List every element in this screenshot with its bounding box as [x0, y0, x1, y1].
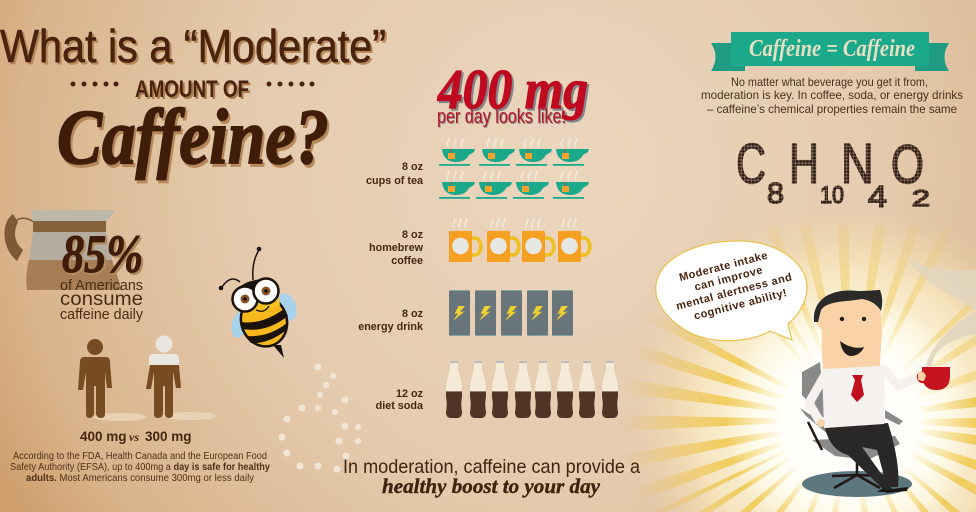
label: energy drink: energy drink [358, 321, 424, 333]
icons: tea cups [439, 138, 589, 199]
chemical formula: O [891, 133, 924, 195]
label: cups of tea [366, 161, 424, 187]
icons: coffee mugs [449, 218, 590, 262]
icon: coffee pot [4, 210, 122, 290]
text block: FDA guidance: adults. Most Americans consume 300mg or less daily [26, 472, 255, 484]
title: Caffeine? [57, 93, 329, 180]
label: cups of tea: 8 oz [402, 161, 424, 173]
sunburst background [620, 205, 976, 512]
eyes [840, 317, 844, 321]
text block: FDA guidance [10, 450, 270, 484]
chemical formula: 8 [767, 178, 784, 210]
chemical formula: 2 [912, 185, 930, 211]
text block: FDA guidance: Safety Authority (EFSA), up to 400mg a day is safe for healthy [10, 461, 270, 473]
stat: 85 percent: of Americans [60, 277, 143, 294]
icon: person 300 mg [146, 336, 217, 420]
chemical formula: N [841, 132, 874, 196]
icon: bee [219, 247, 300, 358]
hand [817, 419, 825, 427]
title: AMOUNT OF [135, 76, 249, 103]
chemical formula: 10 [820, 182, 844, 209]
text block: moderation is key: – caffeine’s chemical properties remain the same [707, 102, 957, 116]
label: homebrew coffee: homebrew [369, 242, 424, 254]
heading: 400 mg per day: per day looks like: [438, 107, 567, 129]
chair base shadow [802, 471, 912, 497]
label: homebrew coffee: coffee [391, 255, 423, 267]
label: energy drink: 8 oz [402, 308, 424, 320]
stat: 85 percent: consume [60, 289, 143, 310]
character: businessman with coffee [800, 290, 950, 497]
speech bubble: can improve [693, 264, 764, 294]
tie [851, 375, 864, 402]
tagline: healthy boost to your day [382, 474, 601, 498]
comparison label: vs [129, 430, 139, 444]
stat: 85 percent: 85% [62, 224, 143, 284]
label: energy drink [358, 308, 424, 333]
stat: 85 percent [60, 224, 145, 323]
head [817, 294, 882, 369]
title: What is a “Moderate” [2, 22, 388, 74]
decorative bubbles [278, 364, 361, 472]
speech bubble: cognitive ability! [693, 287, 789, 323]
label: cups of tea: cups of tea [366, 175, 424, 187]
left arm [809, 373, 826, 422]
stat: 85 percent: 85% [64, 226, 145, 286]
label: diet soda: diet soda [376, 400, 424, 412]
heading: 400 mg per day: 400 mg [437, 59, 588, 121]
tagline: In moderation, caffeine can provide a [343, 456, 640, 478]
coffee cup [922, 367, 950, 390]
icons: soda bottles [446, 361, 618, 418]
label: homebrew coffee [369, 229, 424, 267]
comparison label: 300 mg [145, 429, 192, 444]
heading: 400 mg per day: per day looks like: [437, 106, 566, 128]
chemical formula: H [789, 132, 819, 196]
label: diet soda: 12 oz [396, 388, 424, 400]
icon: person 400 mg [78, 339, 147, 421]
icons: energy drink cans [449, 290, 573, 336]
chemical formula [736, 132, 930, 214]
speech bubble [656, 241, 807, 341]
comparison label: 400 mg [80, 429, 127, 444]
right arm [884, 368, 918, 386]
legs [825, 423, 898, 492]
speech bubble: mental alertness and [675, 271, 794, 313]
title [0, 20, 388, 183]
text block: moderation is key [701, 75, 963, 116]
text block: moderation is key: moderation is key. In coffee, soda, or energy drinks [701, 88, 963, 102]
text block: FDA guidance: According to the FDA, Health Canada and the European Food [13, 450, 267, 462]
hair [814, 290, 882, 322]
tagline [343, 456, 640, 498]
heading: 400 mg per day: 400 mg [439, 61, 590, 123]
label: diet soda [376, 388, 424, 412]
stat: 85 percent: caffeine daily [60, 306, 143, 323]
shirt [822, 365, 885, 428]
chair [800, 362, 903, 460]
title: Caffeine? [59, 96, 331, 183]
speech bubble: Moderate intake [678, 250, 769, 284]
title: AMOUNT OF [137, 78, 251, 105]
title: What is a “Moderate” [0, 20, 386, 72]
chemical formula: C [736, 132, 766, 196]
banner: Caffeine = Caffeine: Caffeine = Caffeine [749, 36, 915, 62]
chemical formula: 4 [868, 179, 887, 214]
mouth [840, 341, 864, 356]
label: homebrew coffee: 8 oz [402, 229, 424, 241]
comparison label [80, 429, 192, 444]
steam swirl [900, 244, 976, 367]
shoe [877, 487, 908, 493]
text block: moderation is key: No matter what beverage you get it from, [731, 75, 928, 89]
chair base [808, 422, 885, 488]
banner: Caffeine = Caffeine [711, 32, 949, 71]
